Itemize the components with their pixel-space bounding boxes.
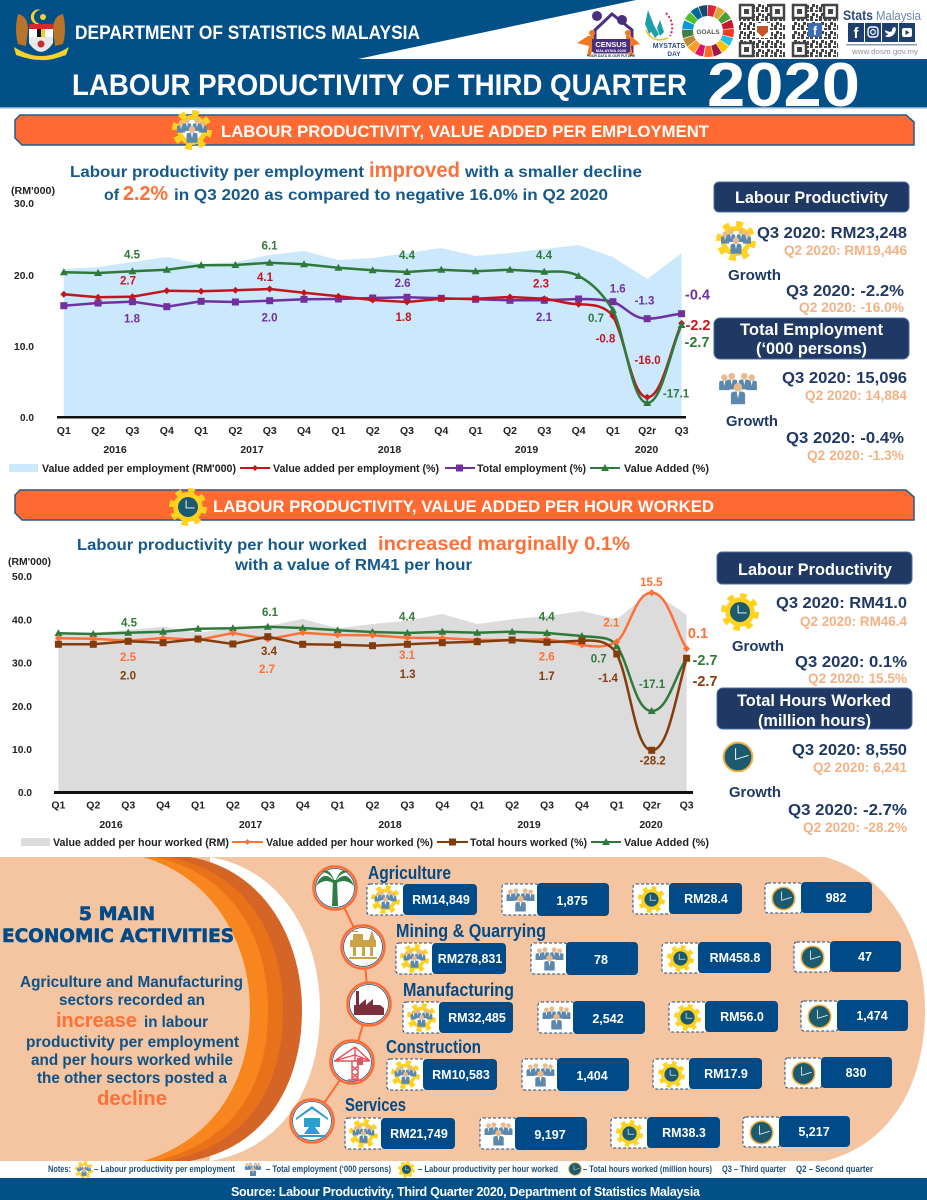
data labels: -0.8 — [596, 334, 616, 346]
headline: employment: improved — [369, 159, 460, 182]
x axis labels: Q1 — [51, 800, 66, 812]
legend: Total hours worked (%) — [470, 837, 587, 849]
sector row: construction: 830 — [846, 1066, 866, 1080]
headline: hour worked: with a value of RM41 per hour — [234, 557, 472, 574]
panel: total hours worked summary: Total Hours Worked — [737, 692, 891, 710]
sector row: agriculture — [367, 863, 872, 916]
panel: total hours worked summary: (million hours) — [758, 712, 871, 730]
x axis labels: Q1 — [191, 800, 205, 812]
notes legend: – Labour productivity per employment — [94, 1164, 235, 1174]
data labels: -17.1 — [639, 679, 666, 691]
sector row: manufacturing: 2,542 — [592, 1012, 624, 1026]
sector row: construction: 1,404 — [576, 1069, 608, 1083]
x axis labels: Q2 — [228, 425, 243, 437]
data labels: 2.5 — [120, 652, 137, 664]
x axis labels: Q3 — [540, 800, 554, 812]
x axis labels — [57, 425, 689, 456]
x axis labels: Q4 — [572, 425, 586, 437]
data labels: 2.6 — [395, 278, 411, 290]
sector row: construction — [386, 1037, 892, 1091]
x axis labels: Q2 — [86, 800, 100, 812]
sector row: agriculture: RM28.4 — [684, 892, 728, 906]
x axis labels: Q1 — [470, 800, 484, 812]
data labels: 1.8 — [396, 312, 412, 324]
logo: Stats Malaysia social media: Stats — [843, 7, 873, 23]
x axis labels: Q1 — [194, 425, 208, 437]
panel: total employment summary: (‘000 persons) — [756, 340, 867, 358]
panel: total employment summary: Q2 2020: 14,884 — [805, 388, 907, 403]
x axis labels: Q3 — [680, 800, 694, 812]
logo: MyStats Day — [645, 10, 686, 58]
data labels: 4.5 — [124, 250, 141, 262]
panel: labour productivity per employment summary — [714, 182, 909, 315]
legend — [21, 837, 709, 849]
x axis labels: Q4 — [435, 800, 449, 812]
sector row: manufacturing: RM32,485 — [448, 1011, 506, 1025]
x axis labels: Q4 — [296, 800, 310, 812]
data labels: 0.7 — [588, 313, 604, 325]
x axis labels: Q4 — [160, 425, 174, 437]
data labels — [120, 577, 718, 768]
notes legend: Notes: — [48, 1164, 71, 1174]
y axis labels: 20.0 — [14, 270, 34, 282]
panel: main economic activities background — [0, 857, 925, 1161]
sector row: agriculture: 982 — [826, 891, 846, 905]
logo: MyStats Day: DAY — [667, 51, 681, 58]
sector row: agriculture: 1,875 — [556, 894, 588, 908]
panel: total hours worked summary: Q3 2020: -2.7% — [788, 802, 907, 819]
x axis labels: Q4 — [434, 425, 448, 437]
panel: labour productivity per employment summary: Q2 2020: RM19,446 — [784, 243, 907, 258]
icon: agriculture palm — [314, 866, 356, 910]
sector row: mining and quarrying: 78 — [594, 953, 608, 967]
headline: employment: 2.2% — [123, 183, 168, 205]
logo: goals wordmark: GOALS — [696, 29, 720, 36]
line series: value added — [58, 627, 687, 711]
data labels: -2.7 — [684, 335, 710, 351]
x axis labels: 2017 — [240, 444, 264, 456]
panel: labour productivity per employment summary: Q3 2020: RM23,248 — [757, 225, 907, 242]
y axis labels: 40.0 — [12, 614, 32, 626]
x axis labels: 2018 — [378, 819, 402, 831]
legend: Value added per hour worked (%) — [266, 837, 433, 849]
legend: Value added per hour worked (RM) — [53, 837, 229, 849]
data labels: 1.8 — [124, 314, 141, 326]
sector row: services: RM38.3 — [662, 1126, 706, 1140]
text block: sector summary: and per hours worked while — [31, 1052, 233, 1069]
x axis labels: Q1 — [469, 425, 483, 437]
y axis labels: 20.0 — [12, 701, 32, 713]
data labels — [120, 240, 710, 400]
x axis labels: Q4 — [156, 800, 170, 812]
notes legend — [48, 1162, 873, 1178]
panel: labour productivity per hour summary: Growth — [732, 639, 784, 655]
axis baseline — [57, 416, 686, 418]
legend: Value added per employment (%) — [273, 463, 439, 475]
y axis labels: 30.0 — [12, 658, 32, 670]
logo: Stats Malaysia social media: Malaysia — [876, 8, 922, 23]
data labels: 0.1 — [688, 626, 708, 642]
logo: census 2020 — [577, 11, 640, 58]
notes legend: Q3 – Third quarter — [722, 1164, 786, 1174]
x axis labels: Q3 — [121, 800, 135, 812]
x axis labels: 2019 — [517, 819, 541, 831]
headline: hour worked — [77, 534, 630, 574]
axis baseline — [54, 791, 693, 794]
logo: census 2020: CENSUS — [595, 40, 627, 49]
panel: total employment summary: Growth — [726, 414, 778, 430]
data labels: 2.0 — [120, 670, 136, 682]
panel: labour productivity per hour summary — [717, 552, 912, 686]
panel heading: 5 main economic activities — [2, 903, 234, 947]
data labels: -28.2 — [639, 756, 666, 768]
data labels: 0.7 — [591, 654, 607, 666]
sector row: services: RM21,749 — [390, 1127, 448, 1141]
x axis labels: Q4 — [575, 800, 589, 812]
panel: labour productivity per hour summary: Q2 2020: RM46.4 — [800, 614, 907, 629]
area series: value added per hour worked — [58, 591, 687, 792]
x axis labels: 2017 — [239, 819, 262, 831]
data labels: 2.7 — [259, 664, 275, 676]
footer source — [0, 1178, 927, 1200]
x axis labels: Q3 — [125, 425, 140, 437]
footer source: Source: Labour Productivity, Third Quarter 2020, Department of Statistics Malaysia — [231, 1185, 701, 1199]
header band — [0, 0, 927, 108]
text block: sector summary: decline — [97, 1088, 167, 1110]
sector row: services: 5,217 — [798, 1125, 830, 1139]
logo: Stats Malaysia social media: www.dosm.gov.my — [851, 47, 918, 56]
icon: mining rig — [342, 926, 384, 968]
data labels: 2.1 — [536, 312, 553, 324]
x axis labels: Q2 — [505, 800, 519, 812]
panel heading: 5 main economic activities: ECONOMIC ACTIVITIES — [2, 925, 234, 947]
panel: total employment summary: Q3 2020: -0.4% — [786, 430, 904, 447]
data labels: 15.5 — [640, 577, 663, 589]
icon: labour productivity gear — [175, 113, 209, 147]
line series: total employment — [64, 297, 682, 319]
x axis labels: Q1 — [610, 800, 624, 812]
line series: value added per employment — [64, 289, 682, 397]
data labels: 6.1 — [262, 240, 278, 252]
sector row: agriculture: Agriculture — [368, 863, 451, 883]
title year: 2020 — [707, 51, 860, 120]
logo: MyStats Day: MYSTATS — [653, 43, 686, 50]
x axis labels: Q3 — [537, 425, 551, 437]
section banner: value added per hour worked: LABOUR PRODUCTIVITY, VALUE ADDED PER HOUR WORKED — [213, 497, 714, 516]
icon: hour worked gear — [172, 491, 204, 523]
icon: services house and computer — [290, 1100, 334, 1142]
x axis labels: 2020 — [639, 819, 663, 831]
headline: employment: of — [104, 187, 120, 204]
sector row: construction: RM10,583 — [432, 1068, 490, 1082]
section banner: value added per employment: LABOUR PRODUCTIVITY, VALUE ADDED PER EMPLOYMENT — [221, 122, 710, 141]
data labels: -0.4 — [685, 288, 710, 304]
logo: census 2020: YOUR DATA IS OUR FUTURE — [587, 54, 636, 58]
headline: employment: Labour productivity per employment — [70, 164, 365, 181]
data labels: -16.0 — [634, 355, 661, 367]
data labels: 6.1 — [262, 607, 279, 619]
line series: total hours worked — [58, 637, 687, 750]
x axis labels: 2016 — [103, 444, 127, 456]
sector row: services: 9,197 — [534, 1128, 566, 1142]
sector row: agriculture: RM14,849 — [412, 893, 470, 907]
QR code: facebook: f — [813, 24, 818, 38]
sector row: manufacturing: 1,474 — [856, 1009, 888, 1023]
icon: manufacturing factory — [348, 982, 390, 1026]
panel: labour productivity per hour summary: Q3 2020: 0.1% — [795, 654, 907, 671]
text block: sector summary: increase — [56, 1010, 137, 1032]
panel: labour productivity per employment summary: Q2 2020: -16.0% — [799, 300, 904, 315]
text block: sector summary — [20, 974, 243, 1110]
panel: total hours worked summary: Q3 2020: 8,550 — [792, 742, 907, 759]
x axis labels: Q2 — [366, 425, 380, 437]
panel: labour productivity per hour summary: Q2 2020: 15.5% — [808, 671, 907, 686]
sector row: manufacturing — [403, 980, 908, 1034]
y axis labels: 0.0 — [18, 787, 32, 799]
headline: hour worked: Labour productivity per hour worked — [77, 537, 367, 554]
section banner: value added per employment — [15, 115, 914, 145]
logo: sustainable development goals wheel — [679, 2, 737, 60]
sector row: manufacturing: RM56.0 — [720, 1010, 764, 1024]
chart: labour productivity per employment — [9, 185, 710, 475]
x axis labels: Q1 — [331, 800, 345, 812]
data labels: 3.1 — [399, 650, 416, 662]
data labels: -1.3 — [635, 296, 654, 308]
x axis labels: Q3 — [675, 425, 689, 437]
data labels: 1.3 — [400, 669, 416, 681]
x axis labels: 2018 — [378, 444, 401, 456]
legend: Value Added (%) — [624, 837, 709, 849]
sector row: services — [345, 1095, 850, 1150]
QR code: website — [739, 4, 785, 57]
y axis labels: (RM'000) — [8, 556, 51, 568]
text block: sector summary: the other sectors posted a — [37, 1070, 227, 1087]
sector row: construction: RM17.9 — [704, 1067, 748, 1081]
y axis labels: (RM'000) — [11, 185, 55, 197]
notes legend: – Labour productivity per hour worked — [418, 1164, 558, 1174]
x axis labels: 2019 — [515, 444, 538, 456]
x axis labels: 2020 — [635, 444, 658, 456]
area series: value added per employment — [64, 245, 682, 417]
logo: Stats Malaysia social media: f — [854, 25, 860, 42]
connector between sector icons — [312, 888, 369, 1121]
data labels: 1.6 — [610, 284, 626, 296]
panel: total employment summary: Q2 2020: -1.3% — [807, 448, 904, 463]
headline: employment: with a smaller decline — [464, 164, 642, 181]
legend: Total employment (%) — [477, 463, 586, 475]
x axis labels: Q2 — [365, 800, 380, 812]
notes legend: – Total hours worked (million hours) — [583, 1164, 712, 1174]
header: department name: DEPARTMENT OF STATISTICS MALAYSIA — [75, 23, 420, 44]
panel: total hours worked summary — [717, 688, 912, 835]
text block: sector summary: productivity per employment — [26, 1034, 239, 1051]
line series: value added per hour worked — [58, 593, 687, 649]
x axis labels: Q2r — [638, 425, 656, 437]
panel: labour productivity per hour summary: Q3 2020: RM41.0 — [776, 595, 907, 612]
text block: sector summary: in labour — [144, 1014, 208, 1031]
panel: total hours worked summary: Q2 2020: -28.2% — [803, 820, 907, 835]
x axis labels: Q1 — [606, 425, 620, 437]
data labels: -2.7 — [692, 674, 718, 690]
panel: total hours worked summary: Q2 2020: 6,241 — [813, 760, 907, 775]
panel: labour productivity per employment summary: Growth — [728, 268, 781, 284]
data labels: 1.7 — [539, 671, 555, 683]
data labels: -2.7 — [692, 653, 718, 669]
y axis labels: 10.0 — [12, 744, 32, 756]
x axis labels — [51, 800, 694, 831]
data labels: 3.4 — [261, 646, 278, 658]
panel: total employment summary: Total Employment — [740, 321, 884, 339]
notes legend: Q2 – Second quarter — [796, 1164, 873, 1174]
x axis labels: Q4 — [297, 425, 311, 437]
data labels: 4.5 — [121, 618, 138, 630]
sector row: services: Services — [345, 1095, 406, 1115]
sector row: construction: Construction — [386, 1037, 481, 1057]
x axis labels: Q3 — [400, 425, 414, 437]
x axis labels: Q2r — [643, 800, 661, 812]
panel: total hours worked summary: Growth — [729, 785, 781, 801]
notes legend: – Total employment (‘000 persons) — [266, 1164, 391, 1174]
text block: sector summary: Agriculture and Manufacturing — [20, 974, 243, 991]
sector row: mining and quarrying: 47 — [858, 950, 872, 964]
panel heading: 5 main economic activities: 5 MAIN — [79, 903, 155, 925]
icon: construction crane — [330, 1040, 374, 1084]
logo: Stats Malaysia social media — [843, 7, 922, 56]
sector row: mining and quarrying: Mining & Quarrying — [396, 921, 546, 941]
panel: labour productivity per employment summary: Q3 2020: -2.2% — [786, 283, 904, 300]
section banner: value added per hour worked — [15, 490, 914, 520]
data labels: 4.4 — [536, 250, 553, 262]
data labels: 2.6 — [539, 652, 555, 664]
x axis labels: Q1 — [331, 425, 346, 437]
panel: total employment summary: Q3 2020: 15,096 — [782, 370, 907, 387]
x axis labels: Q3 — [263, 425, 277, 437]
text block: sector summary: sectors recorded an — [59, 992, 205, 1009]
y axis labels — [8, 556, 51, 799]
panel: total employment summary — [714, 318, 909, 463]
legend: Value added per employment (RM'000) — [42, 463, 236, 475]
sector row: mining and quarrying: RM458.8 — [710, 951, 760, 965]
x axis labels: 2016 — [99, 819, 123, 831]
x axis labels: Q2 — [91, 425, 105, 437]
x axis labels: Q1 — [57, 425, 71, 437]
data labels: 2.3 — [533, 278, 549, 290]
headline: employment: in Q3 2020 as compared to negative 16.0% in Q2 2020 — [174, 187, 608, 204]
data labels: 2.0 — [262, 312, 278, 324]
logo: census 2020: MALAYSIA 2020 — [596, 48, 627, 53]
y axis labels: 10.0 — [14, 341, 34, 353]
QR code: facebook — [792, 4, 838, 57]
x axis labels: Q3 — [400, 800, 415, 812]
legend: Value Added (%) — [624, 463, 709, 475]
data labels: 4.4 — [539, 612, 555, 624]
sector row: mining and quarrying — [396, 921, 901, 975]
data labels: -2.2 — [686, 318, 710, 334]
y axis labels: 0.0 — [20, 412, 34, 424]
headline: hour worked: increased marginally 0.1% — [378, 534, 630, 555]
chart: labour productivity per hour worked — [8, 556, 718, 849]
line series: value added — [64, 263, 682, 403]
sector row: manufacturing: Manufacturing — [403, 980, 514, 1000]
sector row: mining and quarrying: RM278,831 — [438, 952, 502, 966]
x axis labels: Q2 — [226, 800, 240, 812]
headline: employment — [70, 159, 642, 205]
y axis labels: 50.0 — [12, 571, 32, 583]
data labels: -1.4 — [598, 673, 619, 685]
data labels: 2.1 — [603, 618, 620, 630]
data labels: -17.1 — [663, 388, 690, 400]
y axis labels: 30.0 — [14, 198, 34, 210]
y axis labels — [11, 185, 55, 424]
icon: Malaysian coat of arms — [14, 10, 69, 60]
data labels: 4.4 — [399, 250, 416, 262]
data labels: 2.7 — [120, 276, 136, 288]
panel: labour productivity per hour summary: Labour Productivity — [738, 561, 893, 579]
x axis labels: Q2 — [503, 425, 517, 437]
data labels: 4.4 — [399, 612, 416, 624]
x axis labels: Q3 — [261, 800, 275, 812]
legend — [9, 463, 709, 475]
data labels: 4.1 — [257, 272, 274, 284]
panel: labour productivity per employment summary: Labour Productivity — [735, 189, 889, 207]
title: LABOUR PRODUCTIVITY OF THIRD QUARTER — [72, 69, 687, 102]
